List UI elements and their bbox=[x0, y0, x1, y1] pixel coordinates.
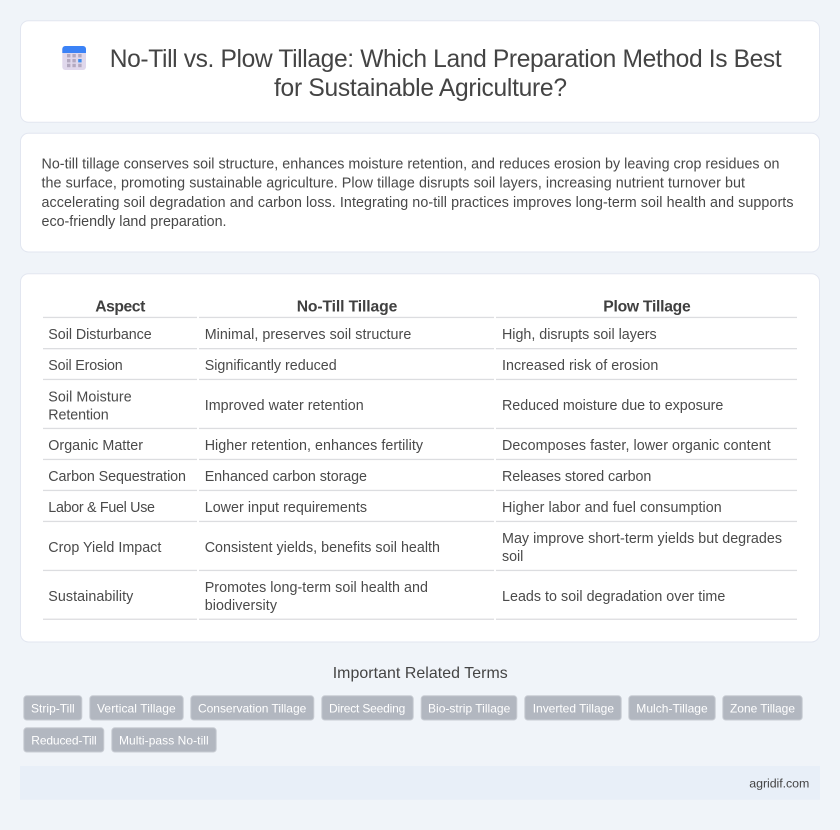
tag: zone tillage: Zone Tillage bbox=[730, 701, 795, 715]
row: sustainability bbox=[48, 580, 725, 614]
panel: title header bbox=[20, 21, 820, 122]
row: crop yield impact bbox=[48, 531, 782, 565]
row: soil disturbance: Minimal, preserves soil structure bbox=[205, 327, 411, 343]
tag: vertical tillage bbox=[90, 696, 183, 720]
tag: inverted tillage bbox=[525, 696, 621, 720]
tag: bio-strip tillage: Bio-strip Tillage bbox=[428, 701, 511, 715]
summary paragraph bbox=[42, 156, 794, 230]
row: crop yield impact: Consistent yields, benefits soil health bbox=[205, 540, 440, 556]
row: soil disturbance: Soil Disturbance bbox=[48, 327, 152, 343]
row: soil erosion: Increased risk of erosion bbox=[502, 358, 658, 374]
summary paragraph: eco-friendly land preparation. bbox=[42, 214, 226, 230]
tag: mulch-tillage bbox=[629, 696, 715, 720]
summary paragraph: No-till tillage conserves soil structure, enhances moisture retention, and reduces erosion by leaving crop residues on bbox=[42, 156, 780, 172]
row: crop yield impact: May improve short-term yields but degrades bbox=[502, 531, 782, 547]
footer bar bbox=[20, 766, 820, 800]
table header: No-Till Tillage bbox=[297, 299, 398, 316]
table rules bbox=[43, 317, 797, 620]
tag: reduced-till: Reduced-Till bbox=[31, 733, 97, 747]
table header bbox=[95, 299, 691, 316]
row: organic matter: Higher retention, enhances fertility bbox=[205, 438, 424, 454]
tag: bio-strip tillage bbox=[421, 696, 517, 720]
tag: conservation tillage: Conservation Tillage bbox=[198, 701, 307, 715]
tag: direct seeding: Direct Seeding bbox=[329, 701, 405, 715]
row: carbon sequestration: Carbon Sequestration bbox=[48, 469, 186, 485]
row: labor and fuel use: Higher labor and fuel consumption bbox=[502, 500, 722, 516]
icon: calendar bbox=[62, 46, 86, 70]
row: carbon sequestration: Releases stored carbon bbox=[502, 469, 651, 485]
tag: reduced-till bbox=[24, 728, 104, 752]
title: No-Till vs. Plow Tillage: Which Land Preparation Method Is Best bbox=[110, 46, 782, 73]
tag: inverted tillage: Inverted Tillage bbox=[533, 701, 614, 715]
heading: important related terms: Important Related Terms bbox=[333, 665, 508, 682]
tag: strip-till bbox=[24, 696, 82, 720]
row: carbon sequestration: Enhanced carbon storage bbox=[205, 469, 367, 485]
row: soil moisture retention: Improved water retention bbox=[205, 398, 364, 414]
row: soil moisture retention: Retention bbox=[48, 407, 109, 423]
tag: multi-pass no-till bbox=[112, 728, 216, 752]
tag: strip-till: Strip-Till bbox=[31, 701, 75, 715]
row: labor and fuel use: Labor & Fuel Use bbox=[48, 500, 155, 516]
row: sustainability: Sustainability bbox=[48, 589, 134, 605]
tag: zone tillage bbox=[723, 696, 802, 720]
summary paragraph: the surface, promoting sustainable agriculture. Plow tillage disrupts soil layers, increasing nutrient turnover but bbox=[42, 176, 745, 192]
title bbox=[110, 46, 782, 102]
tag: multi-pass no-till: Multi-pass No-till bbox=[119, 733, 209, 747]
row: soil disturbance bbox=[48, 327, 657, 343]
row: sustainability: Promotes long-term soil health and bbox=[205, 580, 428, 596]
row: sustainability: biodiversity bbox=[205, 598, 278, 614]
row: organic matter bbox=[48, 438, 771, 454]
row: soil moisture retention: Reduced moisture due to exposure bbox=[502, 398, 723, 414]
row: soil erosion: Soil Erosion bbox=[48, 358, 123, 374]
related term tags bbox=[24, 696, 802, 752]
tag: vertical tillage: Vertical Tillage bbox=[97, 701, 176, 715]
row: crop yield impact: soil bbox=[502, 549, 523, 565]
panel: comparison table bbox=[20, 274, 820, 642]
row: organic matter: Organic Matter bbox=[48, 438, 143, 454]
row: sustainability: Leads to soil degradation over time bbox=[502, 589, 725, 605]
tag: direct seeding bbox=[322, 696, 413, 720]
table header: Plow Tillage bbox=[603, 299, 691, 316]
row: soil moisture retention: Soil Moisture bbox=[48, 389, 132, 405]
footer bar: agridif.com bbox=[749, 776, 809, 790]
row: labor and fuel use bbox=[48, 500, 722, 516]
table header: Aspect bbox=[95, 299, 146, 316]
title: for Sustainable Agriculture? bbox=[274, 75, 567, 102]
row: soil disturbance: High, disrupts soil layers bbox=[502, 327, 657, 343]
row: labor and fuel use: Lower input requirements bbox=[205, 500, 367, 516]
summary paragraph: accelerating soil degradation and carbon loss. Integrating no-till practices improves long-term soil health and supports bbox=[42, 195, 794, 211]
row: soil erosion bbox=[48, 358, 658, 374]
row: soil moisture retention bbox=[48, 389, 723, 423]
row: carbon sequestration bbox=[48, 469, 651, 485]
panel: summary bbox=[20, 133, 820, 252]
row: organic matter: Decomposes faster, lower organic content bbox=[502, 438, 771, 454]
tag: conservation tillage bbox=[191, 696, 314, 720]
row: crop yield impact: Crop Yield Impact bbox=[48, 540, 161, 556]
tag: mulch-tillage: Mulch-Tillage bbox=[636, 701, 708, 715]
row: soil erosion: Significantly reduced bbox=[205, 358, 337, 374]
